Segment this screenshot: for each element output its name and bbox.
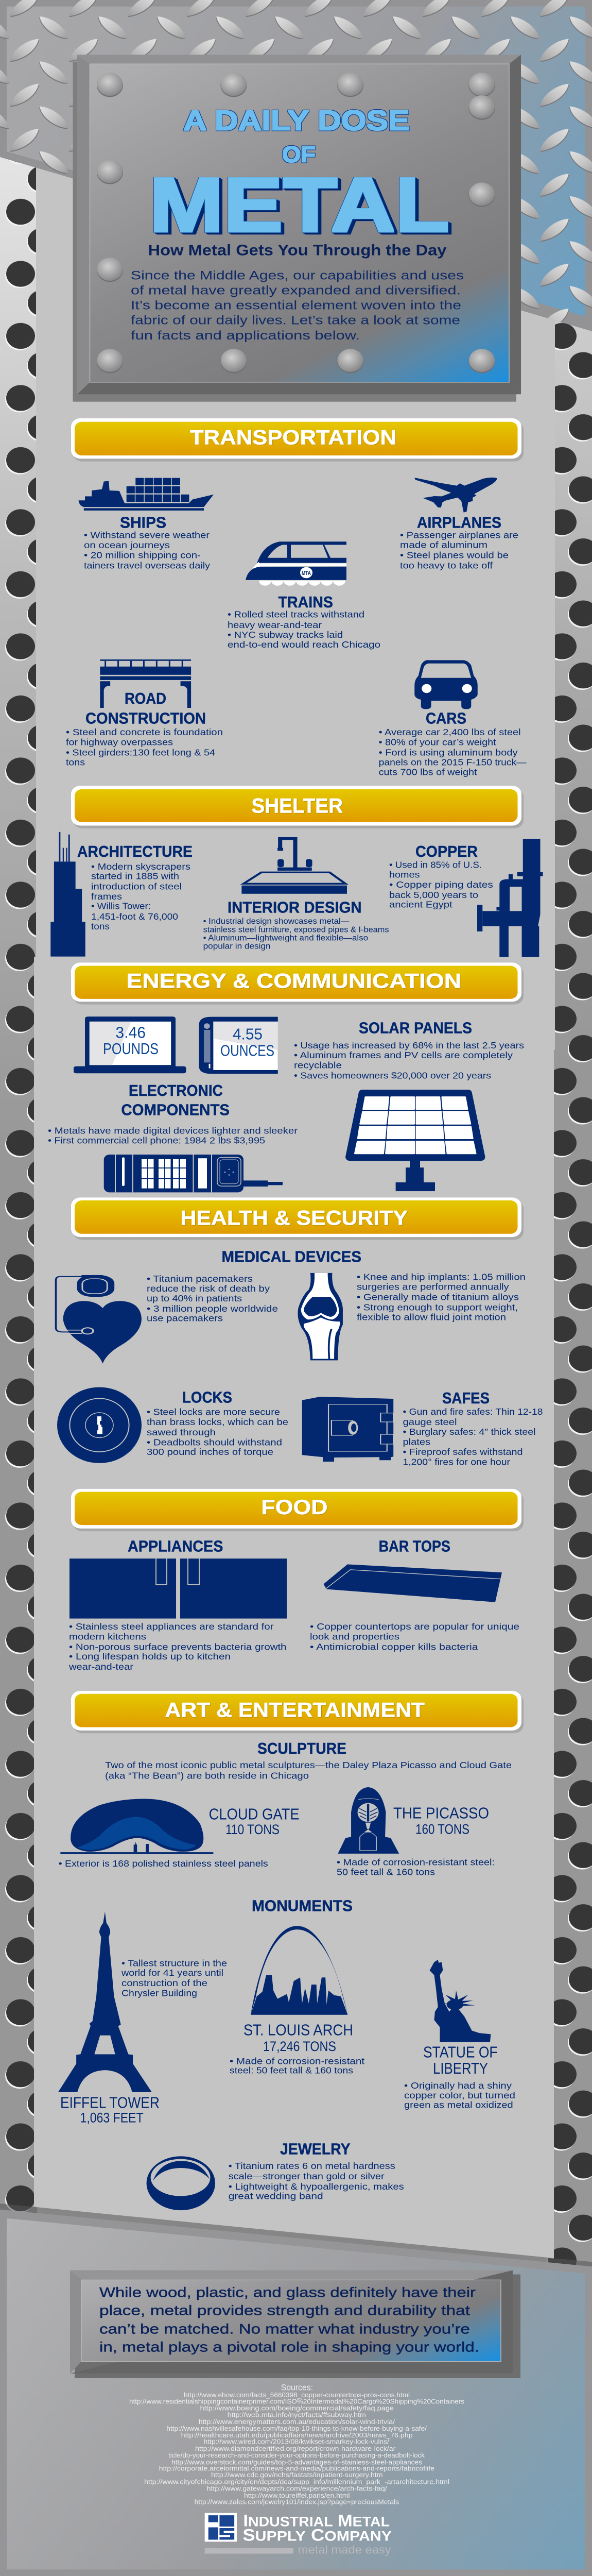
text: trains facts <box>228 610 380 650</box>
text: eiffel facts: • Tallest structure in the <box>121 1958 227 1969</box>
text: statue facts: green as metal oxidized <box>404 2100 513 2110</box>
sources list: http://www.cdc.gov/nchs/fastats/inpatient-surgery.htm <box>211 2471 383 2479</box>
text: cars facts: • 80% of your car’s weight <box>379 737 496 748</box>
text: airplanes facts: • Steel planes would be <box>400 551 509 561</box>
sources list: http://www.overstock.com/guides/top-5-advantages-of-stainless-steel-appliances <box>171 2459 422 2466</box>
text: sculpture intro: (aka “The Bean”) are both reside in Chicago <box>105 1771 309 1781</box>
text: eiffel facts: construction of the <box>121 1978 207 1988</box>
icon: laptop: POUNDS <box>103 1040 159 1058</box>
icon: smartphone <box>199 1017 278 1074</box>
text: locks facts: 300 pound inches of torque <box>147 1447 273 1458</box>
heading: interior design: INTERIOR DESIGN <box>228 899 362 916</box>
icon: the picasso <box>338 1787 399 1854</box>
text: jewelry facts: scale—stronger than gold or silver <box>229 2172 385 2182</box>
text: airplanes facts: too heavy to take off <box>400 561 493 571</box>
heading: ships: SHIPS <box>120 514 166 531</box>
text: implant facts: • Strong enough to support weight, <box>357 1302 518 1313</box>
heading: statue of liberty: LIBERTY <box>433 2060 488 2077</box>
text: solar facts: • Aluminum frames and PV cells are completely <box>294 1050 513 1061</box>
heading: solar panels: SOLAR PANELS <box>359 1019 472 1037</box>
sources list: http://www.wired.com/2013/08/kwikset-smarkey-lock-vulns/ <box>204 2438 389 2446</box>
text: ships facts <box>84 530 211 571</box>
icon: subway train <box>246 541 346 586</box>
text: solar facts: • Usage has increased by 68% in the last 2.5 years <box>294 1041 524 1051</box>
text: picasso facts: • Made of corrosion-resistant steel: <box>337 1857 495 1868</box>
text: safes facts <box>403 1407 543 1467</box>
text: electronic facts: • First commercial cell phone: 1984 2 lbs $3,995 <box>48 1136 265 1146</box>
icon: laptop: 3.46 <box>115 1024 146 1041</box>
text: interior design facts: popular in design <box>203 942 271 951</box>
text: safes facts: 1,200° fires for one hour <box>403 1457 511 1467</box>
title plate <box>73 55 521 402</box>
text: jewelry facts: great wedding band <box>229 2191 323 2201</box>
text: locks facts: sawed through <box>147 1428 216 1438</box>
text: appliances facts: • Non-porous surface prevents bacteria growth <box>69 1642 287 1652</box>
title: of: OF <box>282 142 316 167</box>
text: appliances facts: modern kitchens <box>69 1632 146 1642</box>
text: interior design facts <box>203 917 389 951</box>
logo mark <box>205 2513 237 2541</box>
icon: deadbolt lock <box>57 1387 142 1463</box>
section: health and security <box>56 1197 543 1467</box>
text: interior design facts: stainless steel furniture, exposed pipes & I-beams <box>203 925 389 934</box>
company name <box>242 2512 392 2545</box>
text: ships facts: • Withstand severe weather <box>84 530 210 540</box>
text: pacemaker facts: reduce the risk of death by <box>147 1284 270 1294</box>
sources list: ticle/do-your-research-and-consider-your-options-before-purchasing-a-deadbolt-lock <box>168 2451 425 2459</box>
title: metal: METAL <box>149 162 449 248</box>
heading: road: ROAD <box>125 690 166 707</box>
text: appliances facts <box>68 1622 287 1672</box>
text: trains facts: • Rolled steel tracks withstand <box>228 610 364 620</box>
banner: energy and communication: ENERGY & COMMUNICATION <box>127 969 461 992</box>
heading: copper: COPPER <box>415 842 478 860</box>
icon: willis tower <box>50 832 85 957</box>
main light panel <box>34 139 555 2259</box>
icon: cloud gate <box>60 1799 213 1854</box>
heading: statue of liberty <box>423 2043 498 2077</box>
text: cars facts: • Ford is using aluminum body <box>379 748 518 758</box>
text: road facts: for highway overpasses <box>66 737 173 748</box>
heading: locks: LOCKS <box>182 1388 232 1406</box>
callout: closing statement plate: in, metal plays a pivotal role in shaping your world. <box>99 2340 479 2355</box>
section: transportation <box>66 418 527 777</box>
sources list: http://healthcare.utah.edu/publicaffairs/news/archive/2003/news_76.php <box>181 2431 413 2439</box>
text: locks facts: • Steel locks are more secure <box>147 1407 280 1417</box>
text: appliances facts: • Stainless steel appliances are standard for <box>69 1622 274 1632</box>
text: arch facts: steel: 50 feet tall & 160 tons <box>230 2065 353 2076</box>
text: copper facts: ancient Egypt <box>389 900 452 910</box>
icon: knee implant <box>298 1273 343 1360</box>
heading: cloud gate: CLOUD GATE <box>209 1805 300 1823</box>
intro paragraph: fabric of our daily lives. Let’s take a look at some <box>131 314 460 327</box>
banner: shelter <box>71 786 524 828</box>
text: bar tops facts: • Antimicrobial copper kills bacteria <box>310 1642 478 1652</box>
heading: cars: CARS <box>426 709 466 727</box>
text: jewelry facts: • Lightweight & hypoallergenic, makes <box>229 2182 404 2192</box>
text: trains facts: end-to-end would reach Chicago <box>228 640 380 650</box>
text: implant facts: • Knee and hip implants: 1.05 million <box>357 1273 526 1282</box>
text: picasso facts <box>337 1857 495 1877</box>
section: energy and communication <box>48 962 524 1192</box>
callout: closing statement plate: While wood, plastic, and glass definitely have their <box>99 2285 476 2300</box>
heading: electronic components <box>121 1081 230 1118</box>
heading: medical devices: MEDICAL DEVICES <box>222 1248 361 1265</box>
text: safes facts: • Burglary safes: 4″ thick steel <box>403 1427 535 1437</box>
icon: countertop <box>323 1564 502 1602</box>
text: electronic facts <box>48 1126 298 1146</box>
text: trains facts: • NYC subway tracks laid <box>228 630 343 640</box>
title: a daily dose: A DAILY DOSE <box>183 105 410 137</box>
text: copper facts: back 5,000 years to <box>389 890 478 901</box>
heading: appliances: APPLIANCES <box>128 1537 223 1555</box>
sources list: http://www.zales.com/jewelry101/index.jsp?page=preciousMetals <box>195 2498 399 2505</box>
text: architecture facts: started in 1885 with <box>91 871 179 882</box>
banner: energy and communication <box>71 962 524 1005</box>
banner: transportation <box>71 418 524 462</box>
intro paragraph: fun facts and applications below. <box>131 329 360 343</box>
text: eiffel facts: world for 41 years until <box>121 1968 223 1978</box>
text: bar tops facts: • Copper countertops are popular for unique <box>310 1622 519 1632</box>
text: implant facts: • Generally made of titanium alloys <box>357 1292 519 1302</box>
icon: road overpass <box>100 659 191 708</box>
text: cloud gate fact: • Exterior is 168 polished stainless steel panels <box>59 1859 268 1869</box>
callout: closing statement plate: can’t be matched. No matter what industry you’re <box>99 2321 470 2337</box>
icon: heart with pacemaker <box>56 1275 142 1364</box>
text: cars facts: • Average car 2,400 lbs of steel <box>379 727 521 738</box>
heading: jewelry: JEWELRY <box>280 2140 351 2158</box>
sources list: http://web.mta.info/nyct/facts/ffsubway.htm <box>228 2411 366 2418</box>
text: locks facts: than brass locks, which can be <box>147 1417 288 1428</box>
text: picasso facts: 50 feet tall & 160 tons <box>337 1867 435 1877</box>
text: architecture facts: • Willis Tower: <box>91 901 151 911</box>
text: solar facts <box>294 1041 524 1081</box>
text: safes facts: plates <box>403 1437 430 1447</box>
text: trains facts: heavy wear-and-tear <box>228 620 322 631</box>
text: road facts: • Steel girders:130 feet long & 54 <box>66 748 215 758</box>
icon: refrigerator <box>69 1558 287 1619</box>
intro paragraph: of metal have greatly expanded and diversified. <box>131 284 461 297</box>
text: architecture facts: 1,451-foot & 76,000 <box>91 912 178 922</box>
stat: cloud gate tons: 110 TONS <box>225 1822 280 1837</box>
section: food <box>68 1489 524 1672</box>
text: architecture facts: frames <box>91 892 122 902</box>
sources list: http://www.boeing.com/boeing/commercial/safety/faq.page <box>200 2404 394 2412</box>
text: cars facts: panels on the 2015 F-150 truck— <box>379 757 527 768</box>
text: copper facts <box>389 860 493 910</box>
text: architecture facts: introduction of steel <box>91 882 182 892</box>
sources list: http://corporate.arcelormittal.com/news-and-media/publications-and-reports/fabricoflife <box>159 2465 434 2472</box>
banner: art and entertainment: ART & ENTERTAINMENT <box>165 1698 425 1721</box>
sources list <box>129 2383 464 2505</box>
sources list: http://www.gatewayarch.com/experience/arch-facts-faq/ <box>207 2485 387 2492</box>
text: pacemaker facts <box>147 1274 278 1324</box>
heading: architecture: ARCHITECTURE <box>77 842 193 860</box>
text: statue facts: copper color, but turned <box>404 2091 515 2101</box>
text: safes facts: • Gun and fire safes: Thin 12-18 <box>403 1407 543 1417</box>
sources list: Sources: <box>281 2383 313 2392</box>
icon: airplane <box>414 478 497 513</box>
text: arch facts: • Made of corrosion-resistant <box>230 2056 365 2066</box>
icon: safe <box>302 1397 393 1462</box>
tagline bar <box>205 2548 293 2554</box>
heading: st louis arch: ST. LOUIS ARCH <box>243 2021 353 2039</box>
text: architecture facts <box>91 862 190 932</box>
intro paragraph: Since the Middle Ages, our capabilities and uses <box>131 268 464 282</box>
text: safes facts: gauge steel <box>403 1417 457 1428</box>
text: eiffel facts <box>121 1958 227 1998</box>
text: solar facts: recyclable <box>294 1061 342 1071</box>
text: electronic facts: • Metals have made digital devices lighter and sleeker <box>48 1126 298 1136</box>
heading: eiffel tower: EIFFEL TOWER <box>60 2094 160 2111</box>
text: road facts <box>66 727 223 768</box>
company name: SUPPLY COMPANY <box>242 2526 392 2545</box>
banner: health and security <box>71 1197 524 1240</box>
text: airplanes facts <box>400 530 518 571</box>
heading: sculpture: SCULPTURE <box>257 1739 346 1757</box>
text: sculpture intro <box>105 1760 512 1781</box>
text: ships facts: on ocean journeys <box>84 540 170 551</box>
sources list: http://www.cityofchicago.org/city/en/depts/dca/supp_info/millennium_park_-artarchitecture.html <box>144 2478 449 2486</box>
sources list: http://www.ehow.com/facts_5660398_copper-countertops-pros-cons.html <box>184 2392 410 2399</box>
text: eiffel facts: Chrysler Building <box>121 1988 197 1998</box>
text: architecture facts: • Modern skyscrapers <box>91 862 190 872</box>
tagline: metal made easy <box>298 2544 391 2556</box>
heading: electronic components: COMPONENTS <box>121 1101 230 1118</box>
heading: the picasso: THE PICASSO <box>393 1804 489 1822</box>
text: implant facts: flexible to allow fluid joint motion <box>357 1312 506 1323</box>
banner: transportation: TRANSPORTATION <box>190 426 396 449</box>
icon: smartphone: 4.55 <box>233 1025 263 1043</box>
icon: copper pipes <box>477 839 543 957</box>
text: pacemaker facts: use pacemakers <box>147 1314 223 1324</box>
icon: laptop <box>74 1016 186 1073</box>
section: shelter <box>50 786 543 957</box>
logo: industrial metal supply company <box>205 2512 392 2556</box>
banner: health and security: HEALTH & SECURITY <box>181 1207 408 1229</box>
stat: picasso tons: 160 TONS <box>415 1822 469 1837</box>
heading: safes: SAFES <box>442 1389 490 1407</box>
banner: food: FOOD <box>262 1496 327 1518</box>
text: road facts: • Steel and concrete is foundation <box>66 727 223 738</box>
text: jewelry facts <box>229 2161 404 2201</box>
text: copper facts: homes <box>389 870 420 880</box>
text: pacemaker facts: up to 40% in patients <box>147 1294 242 1304</box>
heading: trains: TRAINS <box>278 594 333 611</box>
sources list: http://www.nashvillesafehouse.com/faq/top-10-things-to-know-before-buying-a-safe/ <box>166 2425 427 2432</box>
text: cars facts: cuts 700 lbs of weight <box>379 767 477 777</box>
text: ships facts: tainers travel overseas daily <box>84 561 211 571</box>
text: locks facts: • Deadbolts should withstand <box>147 1437 282 1448</box>
rivets <box>97 73 495 373</box>
text: implant facts: surgeries are performed annually <box>357 1282 509 1292</box>
text: airplanes facts: • Passenger airplanes are <box>400 530 518 540</box>
heading: construction: CONSTRUCTION <box>85 709 206 727</box>
heading: airplanes: AIRPLANES <box>417 514 501 531</box>
text: safes facts: • Fireproof safes withstand <box>403 1447 523 1458</box>
text: airplanes facts: made of aluminum <box>400 540 487 550</box>
text: appliances facts: • Long lifespan holds up to kitchen <box>69 1652 231 1662</box>
text: jewelry facts: • Titanium rates 6 on metal hardness <box>229 2161 395 2172</box>
text: ships facts: • 20 million shipping con- <box>84 551 201 561</box>
icon: container ship <box>79 478 214 511</box>
text: interior design facts: • Aluminum—lightweight and flexible—also <box>203 933 368 942</box>
text: pacemaker facts: • Titanium pacemakers <box>147 1274 253 1284</box>
text: road facts: tons <box>66 757 85 768</box>
text: interior design facts: • Industrial design showcases metal— <box>203 917 350 926</box>
text: appliances facts: wear-and-tear <box>68 1662 134 1672</box>
heading: statue of liberty: STATUE OF <box>423 2043 498 2061</box>
sources list: http://www.energymatters.com.au/education/solar-wind-trivia/ <box>199 2418 395 2426</box>
text: sculpture intro: Two of the most iconic public metal sculptures—the Daley Plaza Picasso and Cloud Gate <box>105 1760 512 1771</box>
callout: closing statement plate: place, metal provides strength and durability that <box>99 2303 470 2318</box>
icon: car <box>414 660 478 709</box>
company name: INDUSTRIAL METAL <box>243 2512 390 2530</box>
banner: food <box>71 1489 524 1531</box>
subtitle: How Metal Gets You Through the Day <box>148 242 447 259</box>
text: pacemaker facts: • 3 million people worldwide <box>147 1304 278 1314</box>
text: cars facts <box>379 727 527 777</box>
text: statue facts <box>404 2081 515 2110</box>
banner: art and entertainment <box>71 1691 524 1733</box>
text: locks facts <box>147 1407 288 1458</box>
sources list: http://www.diamondcertified.org/report/crown-hardware-lock/ar- <box>195 2445 398 2452</box>
intro paragraph <box>131 268 464 343</box>
icon: gateway arch with skyline <box>251 1926 347 2015</box>
icon: subway train: MTA <box>302 570 311 577</box>
sources list: http://www.residentialshippingcontainerprimer.com/ISO%20Intermodal%20Cargo%20Shipping%20Containers <box>129 2398 464 2405</box>
icon: solar panel <box>345 1090 485 1191</box>
icon: statue of liberty <box>430 1960 491 2042</box>
text: copper facts: • Copper piping dates <box>389 880 493 890</box>
heading: bar tops: BAR TOPS <box>379 1537 450 1555</box>
text: solar facts: • Saves homeowners $20,000 over 20 years <box>294 1071 491 1081</box>
text: arch facts <box>230 2056 365 2076</box>
icon: kitchen sink <box>241 839 347 894</box>
icon: titanium ring <box>147 2156 215 2210</box>
text: statue facts: • Originally had a shiny <box>404 2081 512 2091</box>
stat: eiffel height: 1,063 FEET <box>80 2110 144 2126</box>
heading: monuments: MONUMENTS <box>252 1897 353 1914</box>
stat: arch tons: 17,246 TONS <box>263 2039 336 2055</box>
text: bar tops facts: look and properties <box>310 1632 399 1642</box>
icon: eiffel tower <box>58 1912 152 2092</box>
heading: electronic components: ELECTRONIC <box>129 1081 223 1099</box>
text: bar tops facts <box>310 1622 519 1652</box>
text: copper facts: • Used in 85% of U.S. <box>389 860 482 870</box>
banner: shelter: SHELTER <box>251 794 343 817</box>
text: implant facts <box>357 1273 526 1323</box>
text: architecture facts: tons <box>91 922 110 932</box>
header tread plate <box>0 0 592 331</box>
sources list: http://www.toureiffel.paris/en.html <box>244 2492 350 2499</box>
footer plate <box>0 2204 592 2576</box>
section: art and entertainment <box>58 1691 524 2210</box>
icon: smartphone: OUNCES <box>220 1042 274 1059</box>
callout: closing statement plate <box>70 2270 520 2378</box>
icon: early cell phone <box>104 1155 283 1192</box>
intro paragraph: It’s become an essential element woven into the <box>131 299 461 312</box>
